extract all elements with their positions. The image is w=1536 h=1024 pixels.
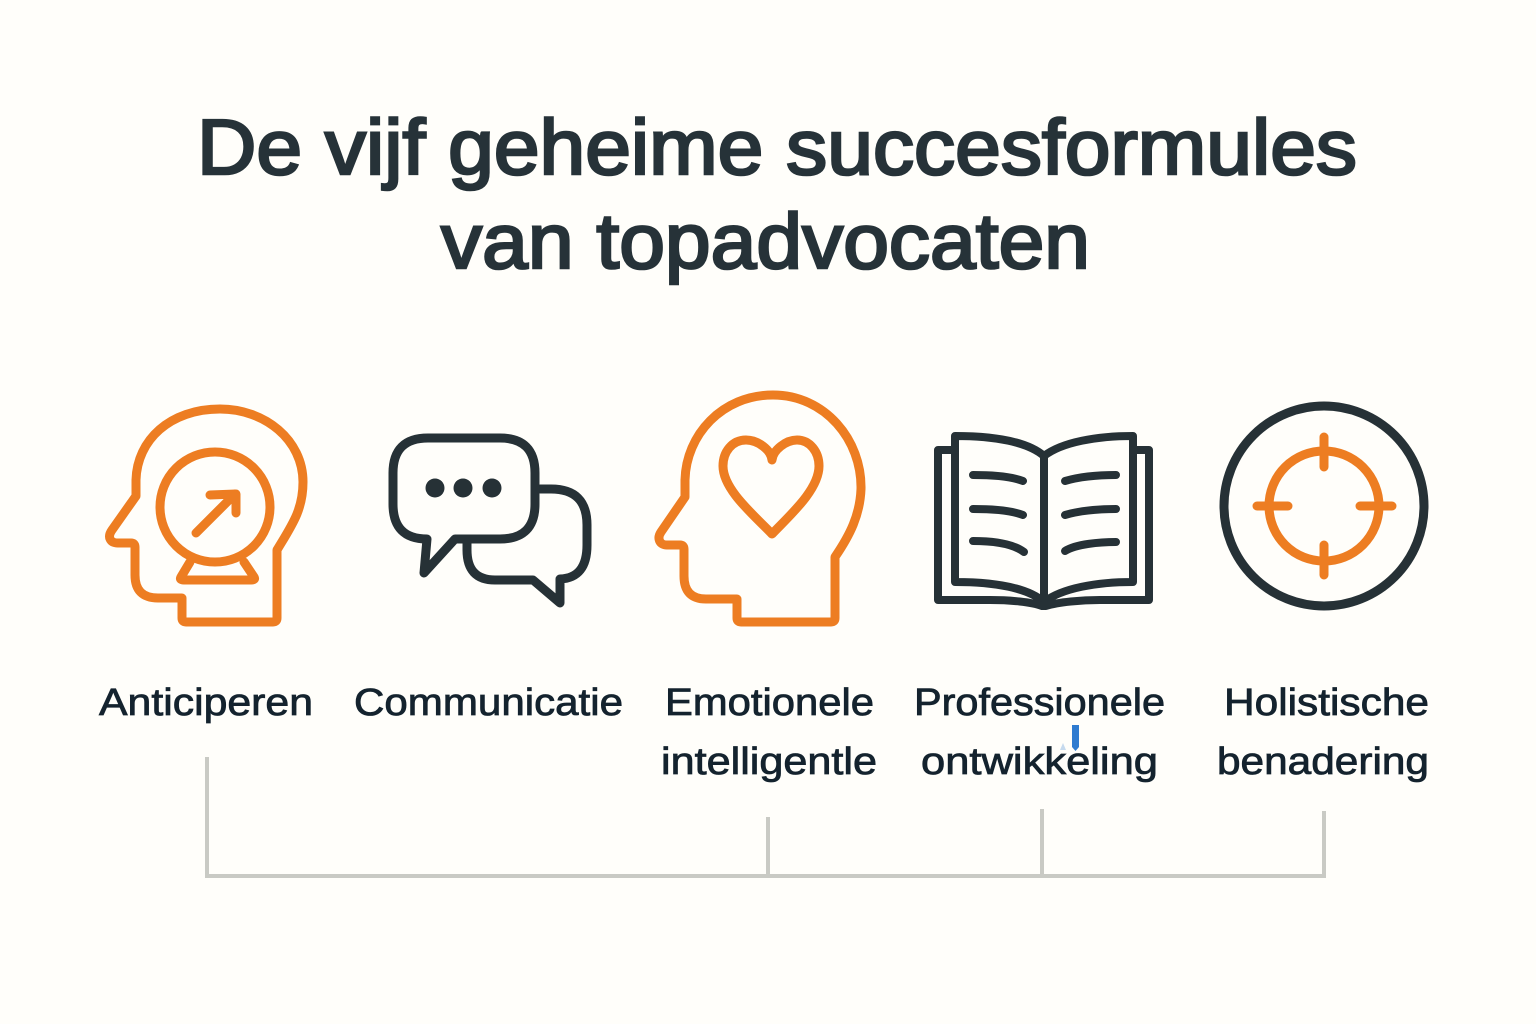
icon: speech bubbles <box>393 438 587 603</box>
label: Emotionele intelligentle <box>661 682 877 783</box>
title: De vijf geheime succesformules <box>197 103 1357 191</box>
label: Emotionele intelligentle: intelligentle <box>661 741 877 783</box>
label: Professionele ontwikkeling: Professionele <box>914 682 1165 724</box>
icon: head with heart (Emotionele intelligentie) <box>659 395 861 622</box>
icon: target crosshair <box>1224 406 1424 606</box>
connector bracket <box>207 757 1324 876</box>
label: Holistische benadering <box>1217 682 1429 783</box>
label: Communicatie: Communicatie <box>354 682 623 724</box>
label: Anticiperen: Anticiperen <box>99 682 313 724</box>
label: Holistische benadering: Holistische <box>1224 682 1429 724</box>
label: Professionele ontwikkeling: ontwikkeling <box>921 741 1158 783</box>
icon: open book <box>938 436 1149 606</box>
label: Professionele ontwikkeling <box>914 682 1165 783</box>
title: van topadvocaten <box>441 197 1090 285</box>
title <box>197 103 1357 285</box>
label: Holistische benadering: benadering <box>1217 741 1429 783</box>
icon: head with dial and arrow (Anticiperen) <box>110 409 303 622</box>
label: Emotionele intelligentle: Emotionele <box>665 682 874 724</box>
blue cursor mark <box>1060 725 1079 751</box>
